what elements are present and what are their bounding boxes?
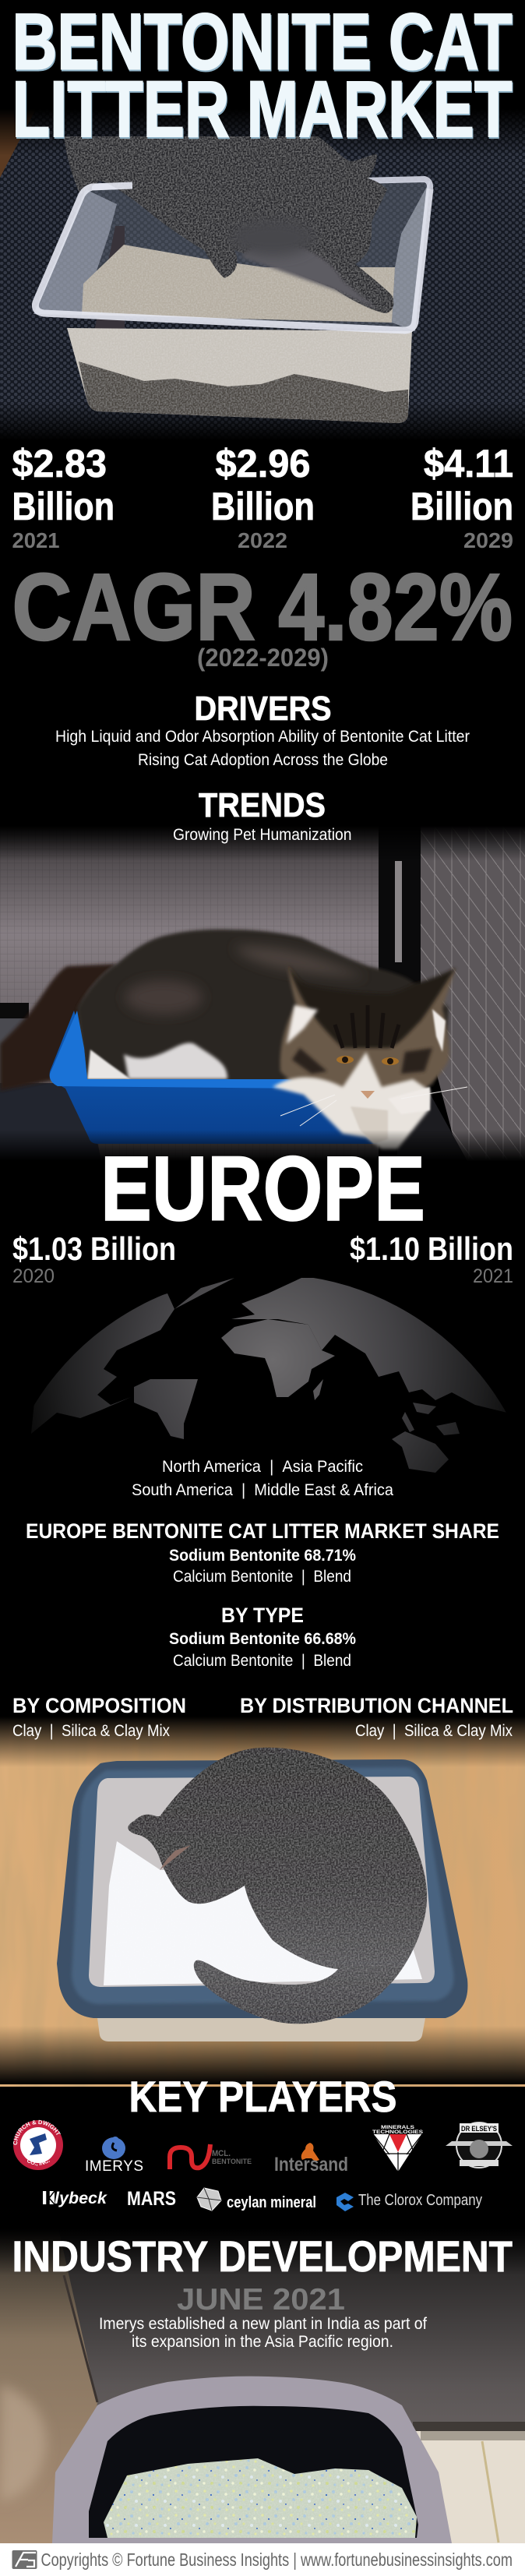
by type: Calcium Bentonite | Blend: [173, 1652, 351, 1670]
CAGR callout: (2022-2029): [197, 644, 329, 672]
trends: TRENDS: [199, 786, 326, 824]
stat: 2029 market size: [410, 442, 513, 552]
logo: Ceylan Mineral: [197, 2188, 316, 2211]
logo: The Clorox Company: The Clorox Company: [358, 2192, 482, 2209]
market share heading and items: Calcium Bentonite | Blend: [173, 1568, 351, 1586]
stat: 2029 market size: $4.11: [424, 442, 513, 485]
logo: Ceylan Mineral: ceylan mineral: [227, 2194, 316, 2211]
logo: Minerals Technologies: TECHNOLOGIES: [372, 2130, 424, 2135]
by type: [169, 1604, 356, 1670]
by distribution channel: BY DISTRIBUTION CHANNEL: [240, 1694, 513, 1717]
logo: The Clorox Company: [336, 2192, 482, 2211]
drivers: High Liquid and Odor Absorption Ability of Bentonite Cat Litter: [55, 728, 470, 746]
Europe 2020 value: 2020: [12, 1265, 55, 1287]
Europe 2020 value: $1.03 Billion: [12, 1230, 176, 1267]
market share heading and items: [26, 1519, 499, 1586]
trends: Growing Pet Humanization: [173, 826, 352, 844]
industry development text: [99, 2283, 427, 2351]
logo: Mars: MARS: [127, 2188, 176, 2210]
photo: grey cat in blue-grey litter tray: [0, 1717, 525, 2087]
trends: [173, 786, 352, 844]
photo: grey cat in clear litter box: [0, 109, 525, 450]
by composition: Clay | Silica & Clay Mix: [12, 1722, 170, 1740]
logo: MCL Bentonite: [170, 2144, 252, 2169]
logo: Church & Dwight: CHURCH & DWIGHT: [12, 2119, 61, 2145]
stat: 2021 market size: Billion: [12, 485, 115, 528]
footer: [0, 2543, 525, 2576]
logo: Intersand: Intersand: [274, 2154, 348, 2175]
key players heading: KEY PLAYERS: [129, 2072, 397, 2121]
logo: Klybeck: lybeck: [55, 2190, 107, 2207]
regions list: South America | Middle East & Africa: [132, 1481, 393, 1499]
logo: Imerys: [85, 2137, 143, 2175]
logo: Minerals Technologies: MINERALS: [381, 2125, 415, 2130]
stat: 2021 market size: 2021: [12, 528, 59, 552]
logo: MCL Bentonite: BENTONITE: [212, 2158, 252, 2165]
by distribution channel: [240, 1694, 513, 1740]
stat: 2022 market size: $2.96: [215, 442, 310, 485]
icon: Fortune Business Insights logo: [12, 2550, 37, 2569]
industry development text: its expansion in the Asia Pacific region.: [132, 2333, 393, 2351]
logo: Church & Dwight: [12, 2119, 63, 2170]
stat: 2029 market size: 2029: [463, 528, 513, 552]
title: [12, 0, 513, 154]
stat: 2022 market size: 2022: [238, 528, 287, 552]
by composition: BY COMPOSITION: [12, 1694, 186, 1717]
stat: 2021 market size: [12, 442, 115, 552]
stat: 2022 market size: Billion: [211, 485, 315, 528]
stat: 2022 market size: [211, 442, 315, 552]
logo: Church & Dwight: CO., INC.: [27, 2160, 50, 2166]
drivers: DRIVERS: [195, 690, 332, 728]
market share heading and items: Sodium Bentonite 68.71%: [169, 1547, 356, 1565]
logo: Imerys: IMERYS: [85, 2158, 143, 2175]
drivers: [55, 690, 470, 769]
by type: BY TYPE: [221, 1604, 304, 1627]
regions list: [132, 1458, 393, 1499]
stat: 2021 market size: $2.83: [12, 442, 107, 485]
Europe 2021 value: [350, 1230, 513, 1287]
by composition: [12, 1694, 186, 1740]
drivers: Rising Cat Adoption Across the Globe: [138, 751, 388, 769]
photo: tabby cat in blue litter box: [0, 826, 525, 1161]
logo: Intersand: [274, 2143, 348, 2175]
Europe heading: EUROPE: [100, 1138, 425, 1240]
logo: MCL Bentonite: MCL.: [212, 2149, 231, 2158]
Europe 2020 value: [12, 1230, 176, 1287]
logo: Minerals Technologies: [372, 2125, 424, 2172]
photo: litter tray with silica crystals: [0, 2228, 525, 2543]
globe map: [31, 1278, 525, 1473]
by type: Sodium Bentonite 66.68%: [169, 1630, 356, 1648]
regions list: North America | Asia Pacific: [162, 1458, 363, 1476]
industry development text: Imerys established a new plant in India as part of: [99, 2315, 427, 2333]
logo: Dr Elsey's: DR ELSEY'S: [461, 2125, 497, 2133]
industry development text: JUNE 2021: [177, 2283, 345, 2317]
logo: Dr Elsey's: [446, 2123, 513, 2168]
Europe 2021 value: 2021: [473, 1265, 513, 1287]
